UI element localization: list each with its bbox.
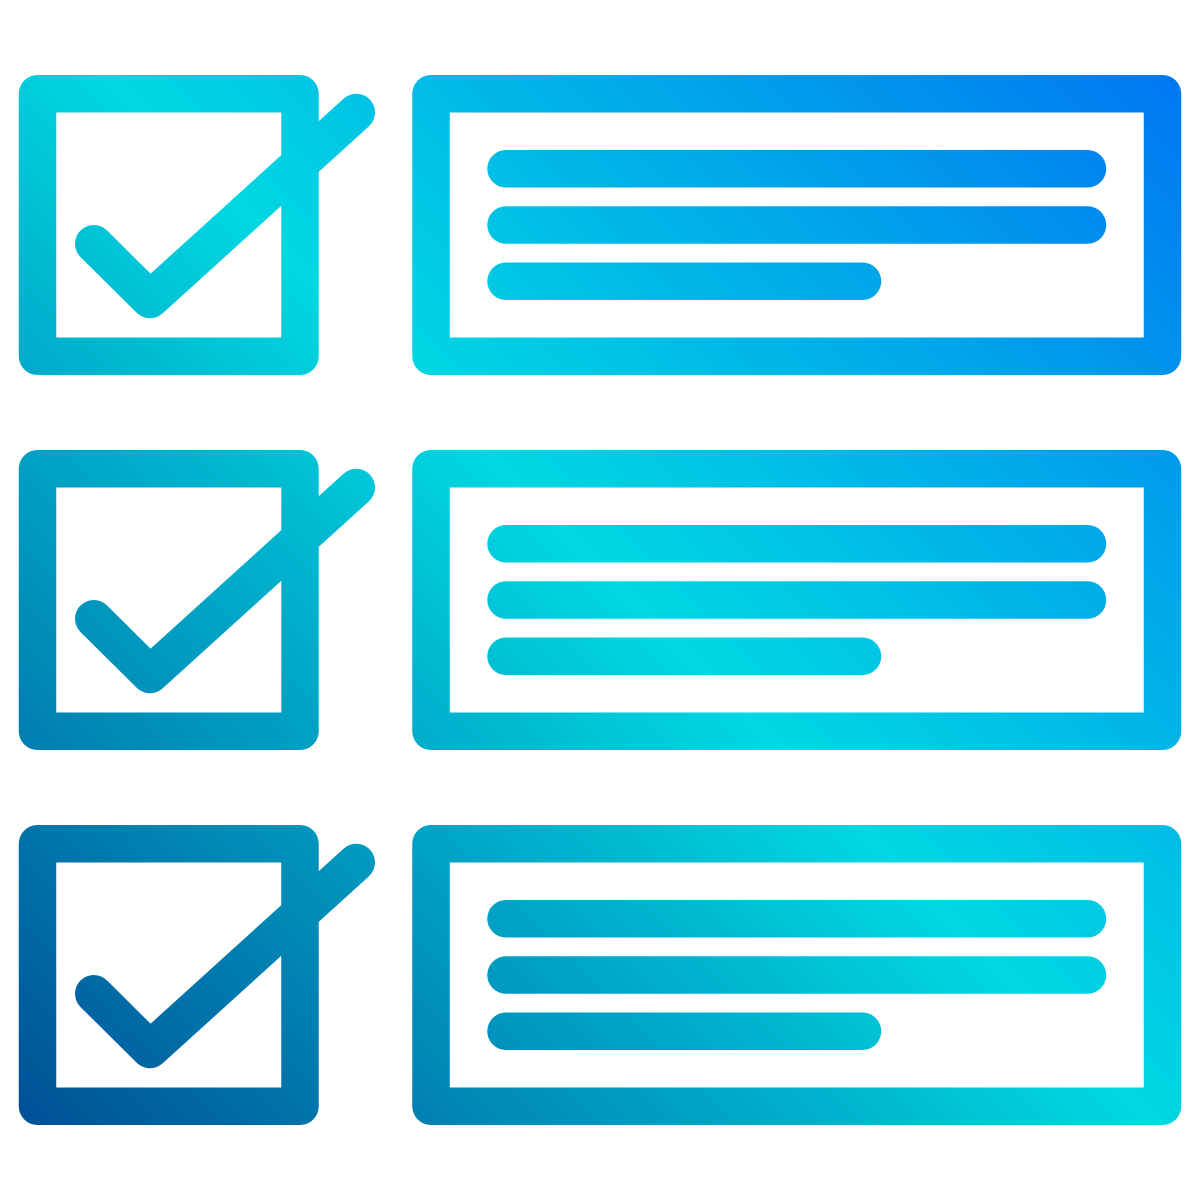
row 1 text line 3 — [506, 262, 862, 300]
row 1 — [38, 94, 1162, 356]
row 3 text line 2 — [506, 956, 1088, 994]
row 2 checkbox — [38, 469, 300, 731]
row 3 text panel — [431, 844, 1162, 1106]
row 1 check mark — [94, 112, 356, 300]
row 3 checkbox — [38, 844, 300, 1106]
row 3 text line 3 — [506, 1012, 862, 1050]
row 1 text line 1 — [506, 150, 1088, 188]
row 3 text line 1 — [506, 900, 1088, 938]
row 1 checkbox — [38, 94, 300, 356]
row 3 — [38, 844, 1162, 1106]
row 1 text line 2 — [506, 206, 1088, 244]
row 2 text line 3 — [506, 638, 862, 675]
row 2 text panel — [431, 469, 1162, 731]
row 2 text line 1 — [506, 525, 1088, 562]
row 2 — [38, 469, 1162, 731]
row 2 text line 2 — [506, 581, 1088, 619]
row 1 text panel — [431, 94, 1162, 356]
row 3 check mark — [94, 862, 356, 1050]
row 2 check mark — [94, 488, 356, 674]
